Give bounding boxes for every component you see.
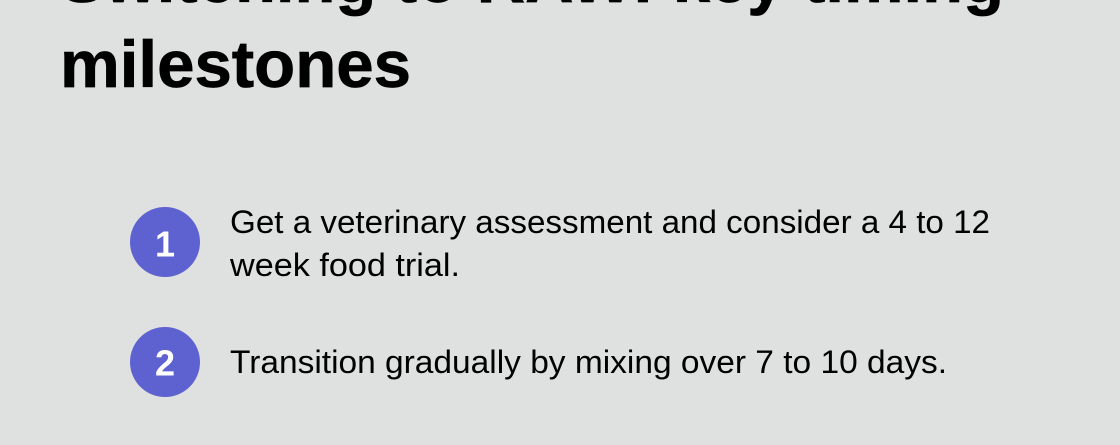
text: step 1 description: week food trial. <box>229 247 460 283</box>
text: step 1 description <box>229 204 990 283</box>
title <box>60 0 1004 101</box>
text: step 2 description: Transition gradually by mixing over 7 to 10 days. <box>230 344 947 380</box>
step 2 <box>130 327 947 397</box>
icon: number badge 2: 2 <box>155 342 175 384</box>
icon: number badge 1 <box>130 207 200 277</box>
text: step 1 description: Get a veterinary assessment and consider a 4 to 12 <box>230 204 990 240</box>
step 1 <box>130 204 990 283</box>
icon: number badge 2 <box>130 327 200 397</box>
title: milestones <box>60 27 411 101</box>
icon: number badge 1: 1 <box>155 224 175 264</box>
